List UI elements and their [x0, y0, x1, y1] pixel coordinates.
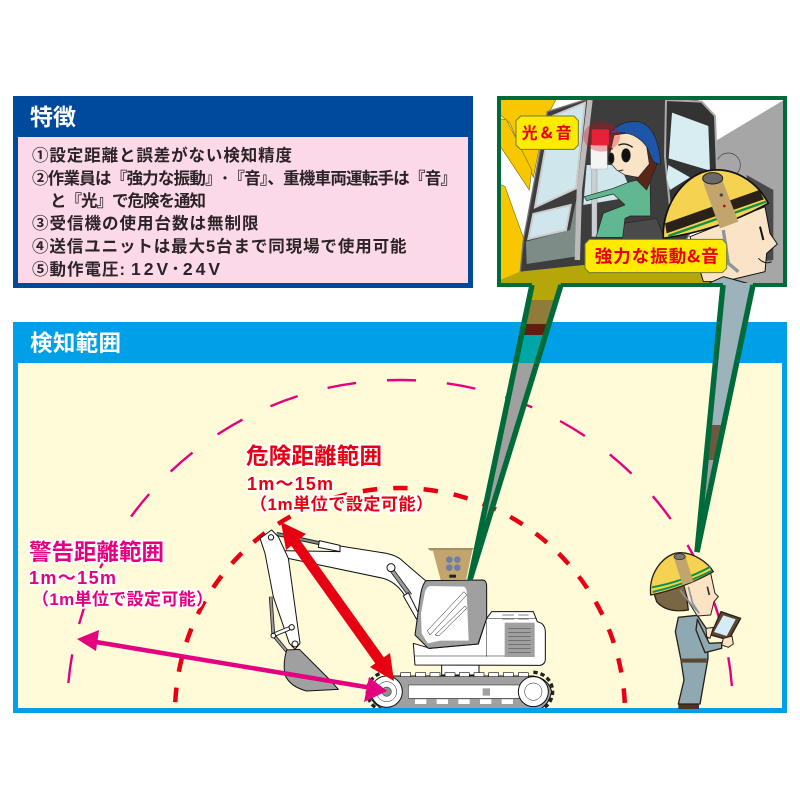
hand	[706, 627, 733, 647]
helmet sensor	[674, 556, 693, 585]
observer face	[690, 207, 777, 285]
track teeth	[533, 672, 553, 711]
feature list: ②作業員は『強力な振動』･『音』、重機車両運転手は『音』	[32, 168, 457, 188]
label: danger range: 1m～15m	[247, 474, 333, 494]
feature list: ⑤動作電圧:	[32, 260, 125, 279]
helmet sensor	[703, 173, 738, 228]
label: warning range: （1m単位で設定可能）	[32, 589, 213, 609]
background wall	[703, 99, 785, 285]
boom ram	[392, 570, 410, 595]
cab right window	[669, 113, 710, 171]
cab left window lower	[528, 205, 571, 239]
face	[683, 573, 718, 616]
door panel	[526, 199, 576, 264]
hair	[654, 585, 688, 611]
arm linkage	[271, 597, 290, 655]
arm	[260, 530, 300, 649]
label: danger range	[246, 444, 433, 514]
label: warning range	[29, 540, 213, 609]
boom cylinder	[277, 534, 320, 543]
worker with tablet	[650, 553, 741, 709]
excavator body	[413, 612, 545, 665]
feature list: 12V･24V	[131, 259, 220, 279]
panel border	[499, 98, 785, 285]
seat	[622, 218, 665, 240]
cab body	[520, 100, 699, 272]
warning lamp	[591, 129, 609, 237]
sensor unit on excavator	[428, 548, 474, 580]
undercarriage neck	[441, 666, 480, 676]
warning range arc	[67, 380, 733, 713]
callout: strong vibration and sound: 強力な振動&音	[595, 244, 719, 269]
cab floor	[501, 265, 710, 283]
red double arrow: danger distance	[281, 522, 394, 681]
arm	[696, 619, 722, 653]
operator	[584, 121, 661, 237]
shoes	[678, 702, 699, 709]
label: danger range: （1m単位で設定可能）	[250, 494, 433, 514]
lamp glow	[583, 122, 620, 152]
label: warning range: 警告距離範囲	[29, 540, 164, 565]
feature list	[32, 145, 457, 279]
cab right window frame	[665, 100, 717, 207]
boom	[285, 546, 426, 611]
cab	[415, 580, 487, 648]
bucket	[284, 649, 338, 691]
drive wheels	[371, 676, 402, 707]
feature list: ④送信ユニットは最大5台まで同現場で使用可能	[32, 236, 407, 256]
callout: light and sound	[516, 116, 578, 149]
heading: detection range: 検知範囲	[30, 331, 121, 356]
callout: strong vibration and sound	[585, 239, 727, 273]
pink double arrow: warning distance	[77, 630, 387, 702]
callout: light and sound: 光&音	[522, 120, 572, 144]
feature list: と『光』で危険を通知	[50, 192, 206, 210]
cab left window upper	[535, 103, 585, 207]
danger range arc	[175, 488, 625, 713]
feature list: ①設定距離と誤差がない検知精度	[32, 145, 292, 165]
zoom beam: to excavator sensor	[467, 283, 564, 581]
label: warning range: 1m～15m	[29, 568, 116, 588]
tablet	[711, 612, 741, 640]
label: danger range: 危険距離範囲	[246, 444, 382, 469]
magnified view panel	[497, 96, 787, 287]
zoom beam: to worker sensor	[694, 283, 756, 553]
feature list: ③受信機の使用台数は無制限	[32, 213, 259, 233]
observer helmet	[663, 170, 768, 238]
work clothes	[675, 615, 708, 704]
track	[368, 676, 552, 711]
helmet	[650, 553, 713, 595]
panel: features	[13, 96, 473, 288]
excavator	[260, 530, 553, 711]
center window	[583, 165, 628, 205]
excavator yellow arm	[498, 98, 557, 287]
track inner bar	[408, 685, 537, 698]
heading: features: 特徴	[30, 104, 76, 130]
